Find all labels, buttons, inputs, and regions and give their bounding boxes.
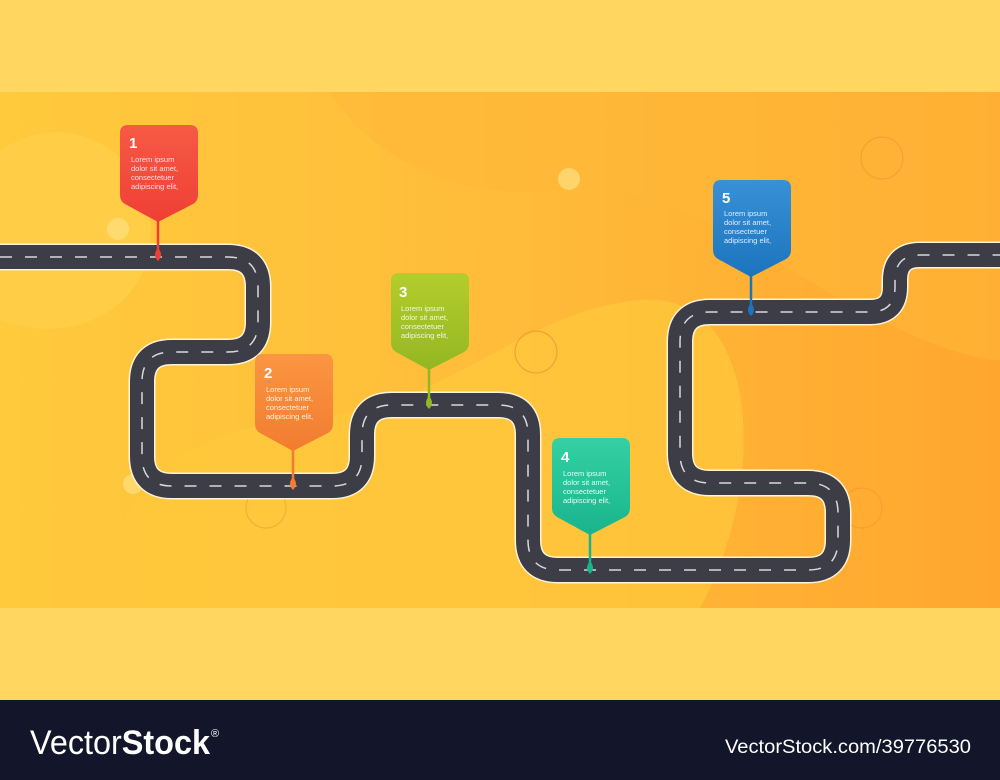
marker 4: adipiscing elit, <box>563 496 610 505</box>
marker 3: 3 <box>399 284 407 301</box>
marker 3: adipiscing elit, <box>401 331 448 340</box>
marker 5: Lorem ipsum <box>724 209 767 218</box>
footer <box>0 700 1000 780</box>
marker 5: adipiscing elit, <box>724 236 771 245</box>
marker 1: 1 <box>129 135 137 152</box>
marker 1: adipiscing elit, <box>131 182 178 191</box>
marker 3 <box>391 273 469 409</box>
top band <box>0 0 1000 92</box>
marker 4: Lorem ipsum <box>563 469 606 478</box>
marker 2: dolor sit amet, <box>266 394 313 403</box>
footer: VectorStock.com/39776530 <box>725 737 971 758</box>
marker 4: dolor sit amet, <box>563 478 610 487</box>
marker 4 <box>552 438 630 574</box>
marker 2: Lorem ipsum <box>266 385 309 394</box>
marker 1: dolor sit amet, <box>131 164 178 173</box>
marker 1 <box>120 125 198 261</box>
footer: ® <box>211 728 219 740</box>
marker 5: dolor sit amet, <box>724 218 771 227</box>
marker 2: consectetuer <box>266 403 309 412</box>
marker 2: 2 <box>264 365 272 382</box>
marker 4: consectetuer <box>563 487 606 496</box>
marker 1: consectetuer <box>131 173 174 182</box>
marker 3: consectetuer <box>401 322 444 331</box>
marker 5: consectetuer <box>724 227 767 236</box>
marker 5 <box>713 180 791 316</box>
marker 3: dolor sit amet, <box>401 313 448 322</box>
marker 4: 4 <box>561 449 570 466</box>
marker 2 <box>255 354 333 490</box>
marker 5: 5 <box>722 190 730 207</box>
main background <box>0 92 1000 608</box>
road <box>0 255 1000 570</box>
footer: VectorStock <box>30 724 210 762</box>
marker 2: adipiscing elit, <box>266 412 313 421</box>
bottom band <box>0 608 1000 700</box>
marker 3: Lorem ipsum <box>401 304 444 313</box>
marker 1: Lorem ipsum <box>131 155 174 164</box>
